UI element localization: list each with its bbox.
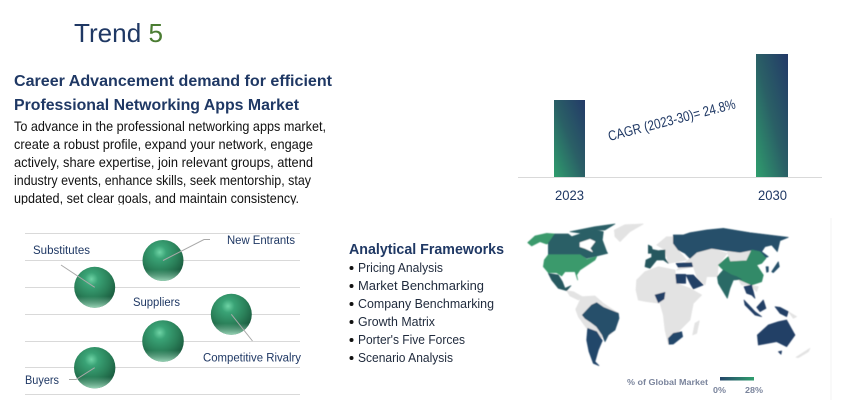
label 2030: 2030 <box>758 187 787 203</box>
arctic islands <box>570 224 615 233</box>
sphere: competitive rivalry <box>211 294 252 335</box>
body text <box>14 118 326 206</box>
brazil <box>582 303 619 342</box>
map: eurasia africa oceania <box>636 228 810 358</box>
hudson bay <box>580 239 595 252</box>
body text: updated, set clear goals, and maintain consistency. <box>14 190 299 206</box>
map legend: 28% <box>745 385 763 395</box>
map: americas <box>528 224 643 366</box>
russia <box>673 228 788 258</box>
bar 2030 <box>756 54 788 177</box>
china <box>718 250 766 285</box>
sphere: buyers <box>74 347 115 388</box>
world map <box>528 224 810 366</box>
nigeria <box>655 292 665 303</box>
label 2023: 2023 <box>555 187 584 203</box>
analytical frameworks heading: Analytical Frameworks <box>349 241 504 258</box>
heading: career advancement <box>14 73 333 114</box>
bar 2023 <box>554 100 585 177</box>
five forces diagram <box>25 234 301 394</box>
CAGR label: CAGR (2023-30)= 24.8% <box>606 96 737 144</box>
heading: career advancement: Professional Networking Apps Market <box>14 97 300 114</box>
sphere: substitutes <box>74 267 115 308</box>
sphere: suppliers <box>142 320 184 362</box>
frameworks list: Company Benchmarking <box>358 296 494 311</box>
turkey <box>676 263 693 267</box>
mexico <box>548 273 571 291</box>
egypt <box>676 274 686 283</box>
heading: career advancement: Career Advancement demand for efficient <box>14 73 333 90</box>
greenland <box>614 224 643 242</box>
canada <box>548 230 608 258</box>
australia <box>757 320 795 354</box>
label: new entrants: New Entrants <box>227 235 295 247</box>
frameworks list: Pricing Analysis <box>358 260 443 275</box>
argentina and chile <box>587 328 602 366</box>
map legend: % of Global Market <box>627 377 708 387</box>
saudi arabia <box>686 275 703 289</box>
indochina land <box>737 277 758 292</box>
central america <box>567 291 583 300</box>
africa <box>636 267 702 344</box>
madagascar <box>693 321 699 335</box>
northern and eastern europe <box>657 237 687 263</box>
mongolia <box>727 250 752 262</box>
map legend: 0% <box>713 385 726 395</box>
body text: actively, share expertise, join relevant groups, attend <box>14 154 313 170</box>
papua and new zealand <box>788 312 810 358</box>
label: substitutes: Substitutes <box>33 245 90 257</box>
bar chart: market growth <box>518 54 822 203</box>
southeast asia <box>744 285 788 317</box>
south africa <box>668 332 683 344</box>
sphere: new entrants <box>142 240 184 281</box>
frameworks list: Porter's Five Forces <box>358 332 465 347</box>
central asia <box>677 248 727 285</box>
frameworks list <box>350 260 494 365</box>
frameworks list: Scenario Analysis <box>358 350 453 365</box>
usa <box>543 255 597 280</box>
label: buyers: Buyers <box>25 375 59 387</box>
alaska <box>528 233 555 246</box>
india <box>717 270 742 298</box>
body text: create a robust profile, expand your network, engage <box>14 136 313 152</box>
japan and korea <box>766 262 779 273</box>
frameworks list: Market Benchmarking <box>358 278 484 293</box>
south america land <box>576 296 618 338</box>
label: competitive rivalry: Competitive Rivalry <box>203 352 301 364</box>
map legend <box>627 377 763 395</box>
europe <box>645 245 668 268</box>
body text: industry events, enhance skills, seek mentorship, stay <box>14 172 311 188</box>
body text: To advance in the professional networking apps market, <box>14 118 326 134</box>
title: Trend 5 <box>74 18 163 48</box>
label: suppliers: Suppliers <box>133 297 180 309</box>
frameworks list: Growth Matrix <box>358 314 435 329</box>
